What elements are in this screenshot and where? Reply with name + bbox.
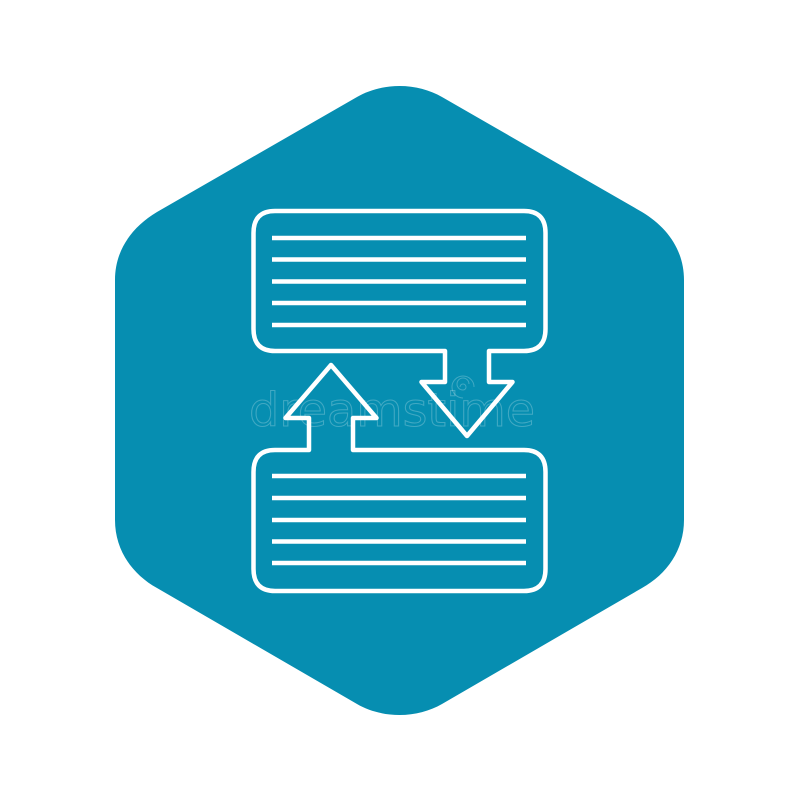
top box outline and down arrow xyxy=(254,211,546,436)
top text box with down arrow xyxy=(254,211,546,436)
bottom box text lines xyxy=(272,476,526,563)
hexagon background xyxy=(115,86,684,715)
bottom box outline and up arrow xyxy=(254,365,546,591)
bottom text box with up arrow xyxy=(254,365,546,591)
top box text lines xyxy=(272,238,526,325)
watermark: dreamstime xyxy=(249,383,535,437)
